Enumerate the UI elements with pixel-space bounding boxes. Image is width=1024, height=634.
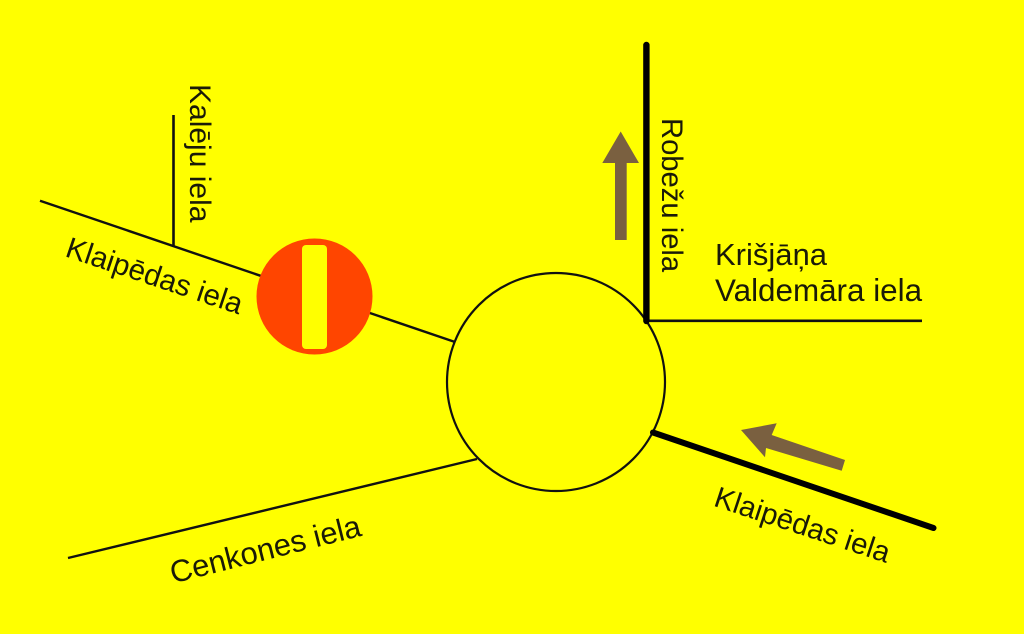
road: Kalēju iela	[172, 115, 175, 247]
road: Klaipēdas iela west	[40, 201, 455, 342]
road: Klaipēdas iela east	[653, 432, 934, 528]
label: Krišjāņa Valdemāra iela: Valdemāra iela	[715, 273, 923, 308]
road: Krišjāņa Valdemāra iela	[647, 319, 922, 322]
label: Klaipēdas iela east: Klaipēdas iela	[710, 481, 895, 570]
road: Robežu iela	[643, 45, 650, 321]
icon: no entry sign	[256, 238, 372, 354]
arrow: north along Robežu iela	[602, 132, 639, 240]
label: Robežu iela: Robežu iela	[655, 118, 687, 273]
label: Krišjāņa Valdemāra iela: Krišjāņa	[715, 237, 828, 272]
road: Cenkones iela	[68, 459, 477, 558]
label: Cenkones iela: Cenkones iela	[166, 508, 365, 590]
arrow: towards roundabout along Klaipēdas iela	[741, 423, 845, 471]
label: Krišjāņa Valdemāra iela	[715, 237, 923, 308]
label: Kalēju iela: Kalēju iela	[183, 84, 216, 223]
roundabout	[447, 273, 665, 491]
label: Klaipēdas iela west: Klaipēdas iela	[62, 231, 248, 321]
